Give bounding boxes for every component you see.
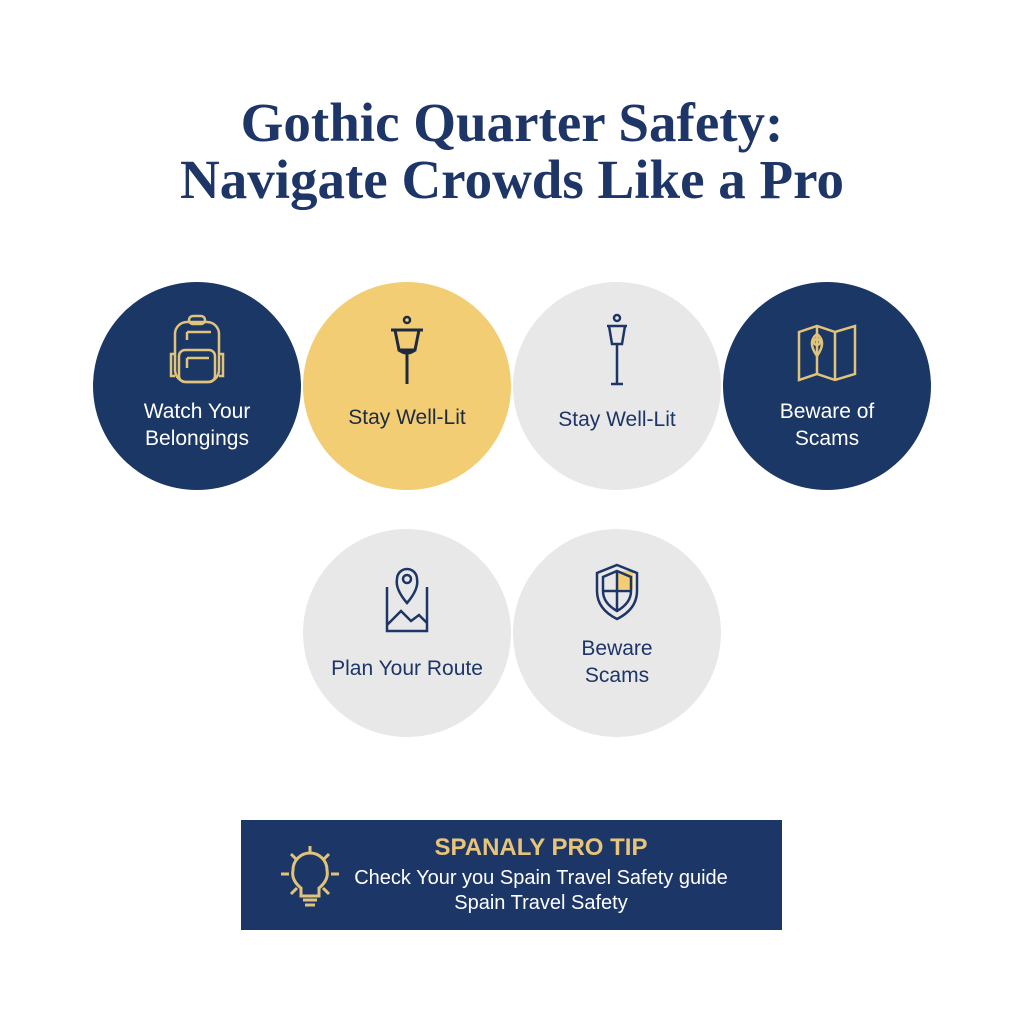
circle: beware scams bbox=[513, 529, 721, 737]
label: Watch Your bbox=[144, 400, 250, 423]
title bbox=[180, 92, 844, 210]
circle: stay well-lit gold bbox=[303, 282, 511, 490]
icon: lamp bbox=[391, 316, 423, 384]
label: Stay Well-Lit bbox=[348, 406, 466, 429]
icon: shield bbox=[596, 564, 638, 620]
tip text: Spain Travel Safety bbox=[454, 892, 628, 914]
circle: watch belongings bbox=[93, 282, 301, 490]
icon: backpack bbox=[170, 314, 224, 384]
tip text: Check Your you Spain Travel Safety guide bbox=[354, 867, 728, 889]
icon: lightbulb bbox=[281, 846, 339, 906]
icon: lamp bbox=[607, 314, 627, 386]
tip text bbox=[354, 867, 728, 914]
circle: beware of scams bbox=[723, 282, 931, 490]
label bbox=[780, 400, 874, 450]
label: Scams bbox=[585, 664, 649, 687]
label bbox=[144, 400, 250, 450]
pro tip box bbox=[241, 820, 782, 930]
label: Stay Well-Lit bbox=[558, 408, 676, 431]
label: Beware bbox=[581, 637, 653, 660]
title: Gothic Quarter Safety: bbox=[241, 92, 783, 153]
label: Beware of bbox=[780, 400, 874, 423]
circle: plan route bbox=[303, 529, 511, 737]
icon: map pin bbox=[386, 568, 428, 632]
label: Belongings bbox=[145, 427, 249, 450]
tip heading: SPANALY PRO TIP bbox=[435, 834, 647, 861]
title: Navigate Crowds Like a Pro bbox=[180, 149, 844, 210]
label bbox=[581, 637, 653, 687]
circle: stay well-lit gray bbox=[513, 282, 721, 490]
label: Plan Your Route bbox=[331, 657, 483, 680]
icon: map bbox=[798, 324, 856, 382]
label: Scams bbox=[795, 427, 859, 450]
